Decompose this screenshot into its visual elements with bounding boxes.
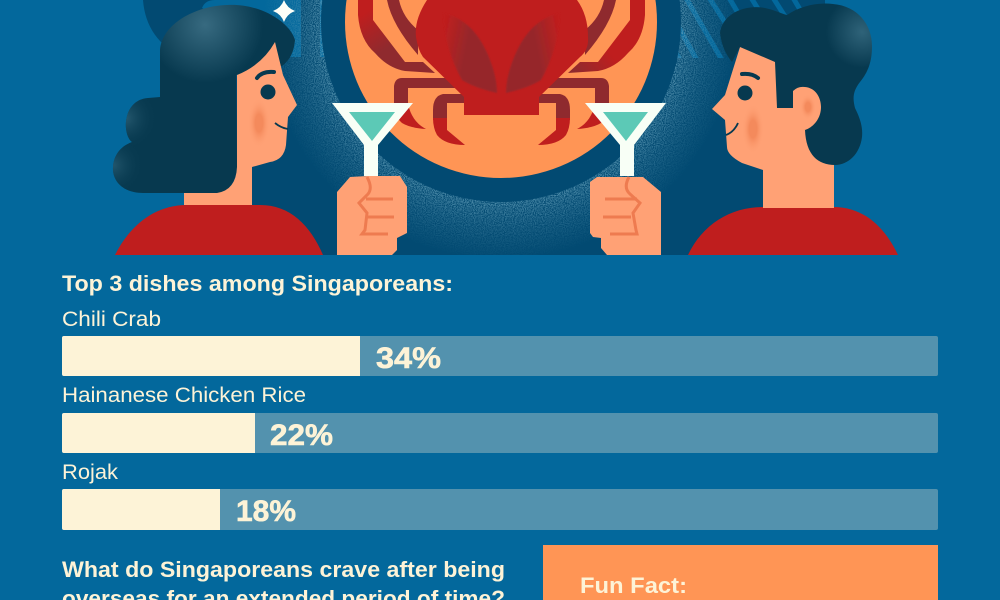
bar fill <box>62 489 220 530</box>
woman <box>112 4 323 255</box>
woman cheek <box>248 98 270 148</box>
crab body and claws <box>416 0 588 115</box>
man eye <box>738 86 752 100</box>
bar fill <box>62 336 360 376</box>
value: 34% <box>376 342 441 375</box>
bar: rojak <box>62 461 938 530</box>
heading: top 3 dishes: Top 3 dishes among Singaporeans: <box>62 271 453 296</box>
bar track <box>62 489 938 530</box>
man face and neck <box>712 47 834 208</box>
man hair <box>720 3 872 165</box>
orange plate <box>345 0 657 178</box>
chili crab <box>358 0 645 145</box>
label: rojak: Rojak <box>62 461 119 484</box>
value: 22% <box>270 419 333 452</box>
man ear and jaw <box>793 87 821 130</box>
question text <box>62 557 505 600</box>
fun fact heading: Fun Fact: <box>580 573 687 598</box>
woman hair <box>112 4 295 193</box>
man <box>688 3 898 255</box>
label: hainanese chicken rice: Hainanese Chicken Rice <box>62 384 306 407</box>
man shirt <box>688 207 898 255</box>
bar: hainanese chicken rice <box>62 384 938 453</box>
man eyebrow <box>742 74 758 78</box>
man inner ear <box>800 94 816 120</box>
left hand <box>337 176 407 255</box>
bar track <box>62 413 938 453</box>
woman eye <box>260 84 276 100</box>
man smile <box>726 123 738 135</box>
grainy glow ring <box>263 0 739 260</box>
woman face and neck <box>184 42 297 205</box>
bar fill <box>62 413 255 453</box>
crab legs, right side <box>538 0 645 145</box>
question text: What do Singaporeans crave after being <box>62 557 505 582</box>
illustration: couple toasting over chili crab <box>83 0 898 260</box>
right hand <box>590 177 661 255</box>
label: chili crab: Chili Crab <box>62 308 161 331</box>
bar track <box>62 336 938 376</box>
sparkle <box>273 0 295 22</box>
woman shirt <box>115 205 323 255</box>
woman eyebrow <box>257 72 274 78</box>
crab legs, left side <box>358 0 465 145</box>
woman smile <box>275 123 288 129</box>
man cheek <box>742 104 764 154</box>
panel: fun fact <box>543 545 938 600</box>
backdrop: dark blue scene <box>143 0 830 255</box>
bar: chili crab <box>62 308 938 376</box>
right martini glass <box>585 103 666 176</box>
value: 18% <box>236 495 296 528</box>
left martini glass <box>332 103 413 176</box>
